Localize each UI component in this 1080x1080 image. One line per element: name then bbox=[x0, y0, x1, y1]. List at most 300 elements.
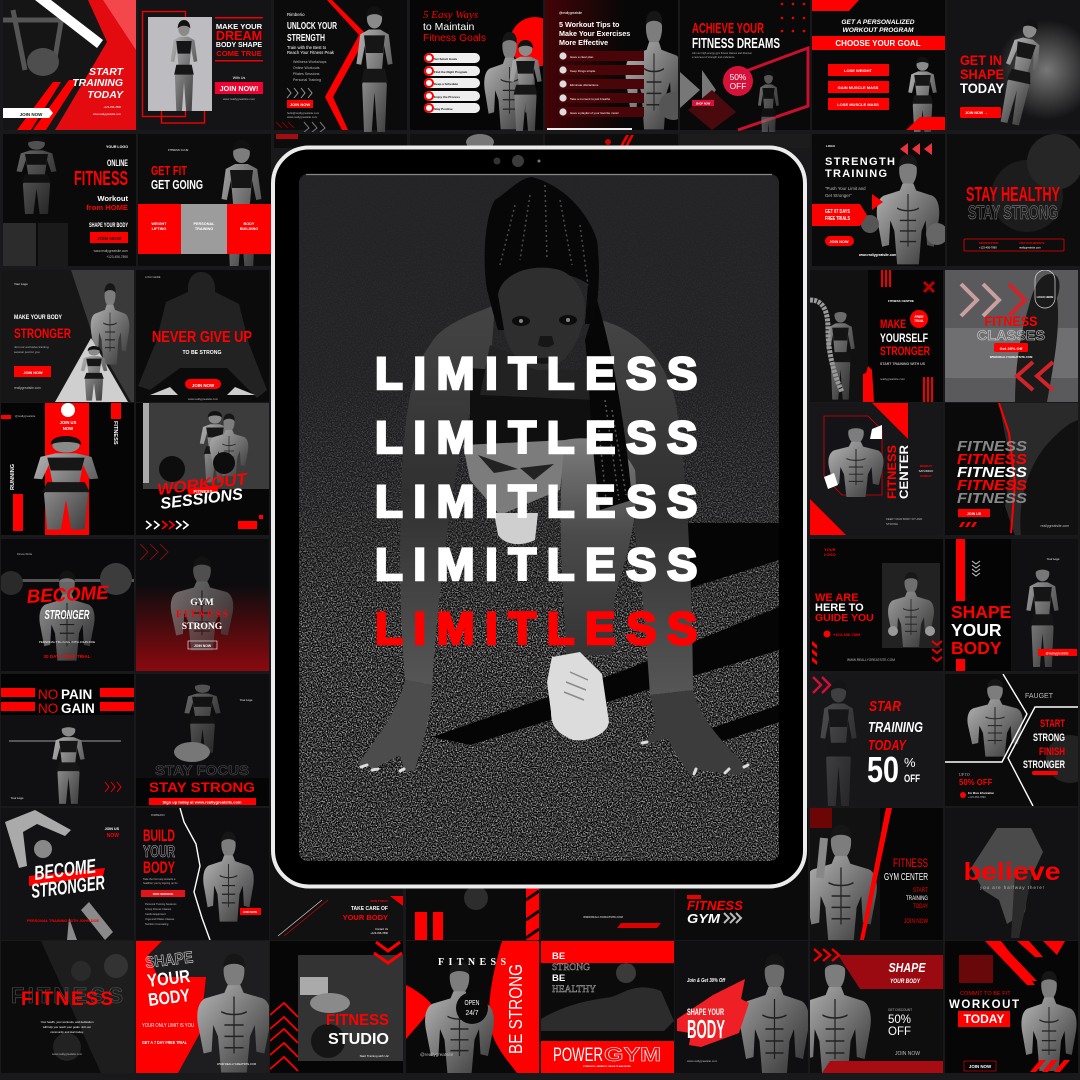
tile: strength training: LOGO bbox=[826, 144, 835, 148]
tile: become stronger: JOIN US bbox=[105, 827, 120, 831]
tile: workout today: JOIN NOW bbox=[969, 1064, 992, 1069]
tile: strength training: STRENGTH bbox=[825, 156, 895, 168]
tile: we are here to guide you: YOUR bbox=[824, 547, 836, 552]
tile: shape your body text: SHAPE bbox=[951, 602, 1011, 622]
tile: stay healthy stay strong bbox=[947, 134, 1080, 267]
tile: start strong finish stronger: FINISH bbox=[1039, 746, 1065, 758]
list of tips: Find the Right Program bbox=[434, 70, 468, 74]
tile: build your body: Nutrition Counseling bbox=[145, 922, 169, 926]
tile: fitness studio: STUDIO bbox=[328, 1031, 389, 1048]
tile: believe: you are halfway there! bbox=[980, 885, 1044, 890]
service panels bbox=[138, 204, 271, 254]
tile: unlock your strength: Pilates Sessions bbox=[293, 72, 320, 76]
headline: limitless repeated bbox=[375, 348, 708, 654]
tile: fitness gym partly hidden: GYM bbox=[687, 911, 721, 926]
tile: get fit get going: FITNESS CLUB bbox=[168, 148, 188, 152]
tile: shape your body 50 off: YOUR BODY bbox=[890, 978, 920, 985]
tile: fitness repeated bbox=[945, 403, 1078, 536]
tile: shape your body text: YOUR bbox=[951, 620, 1002, 640]
tile: fitness dumbbells bbox=[1, 941, 134, 1073]
tile: we are here to guide you: LOGO bbox=[824, 552, 836, 557]
tile: fitness center: KEEP YOUR BODY FIT AND bbox=[886, 517, 922, 521]
tile: power gym: BE bbox=[552, 973, 565, 984]
tile: build your body: Yoga and Pilates Classes bbox=[145, 917, 175, 921]
tile: running join us: FITNESS bbox=[112, 421, 118, 445]
tile: website partly hidden bbox=[541, 808, 674, 940]
tile: never give up: www.reallygreatsite.com bbox=[188, 397, 219, 401]
tile: get in shape today: SHAPE bbox=[960, 67, 1004, 82]
tile: build your body: OUR SERVICE bbox=[153, 892, 173, 896]
tile: strength training: FREE TRIALS bbox=[825, 216, 851, 222]
tile: shape your body bbox=[136, 941, 271, 1073]
tile: achieve your fitness dreams: SHOP NOW bbox=[696, 102, 711, 106]
tile: make yourself stronger bbox=[810, 270, 943, 402]
tile: make your dream body shape: COME TRUE bbox=[216, 49, 262, 58]
tile: strength training: JOIN NOW bbox=[829, 240, 849, 244]
tile: 5 workout tips bbox=[545, 0, 687, 130]
tile: never give up bbox=[136, 270, 269, 402]
tile: fitness studio bbox=[270, 941, 403, 1073]
tile: start training today: TODAY bbox=[87, 89, 124, 101]
tile: workout sessions: FITNESS bbox=[193, 489, 213, 494]
tile: make your dream body shape: DREAM bbox=[216, 29, 262, 43]
tile: 5 easy ways: Fitness Goals bbox=[423, 33, 486, 44]
tile: make yourself stronger: reallygreatsite.com bbox=[880, 377, 906, 381]
tile: fitness repeated: reallygreatsite.com bbox=[1041, 524, 1069, 528]
tile: workout today bbox=[945, 941, 1078, 1073]
tile: power gym: GYM bbox=[604, 1045, 661, 1066]
tile: unlock your strength: Online Workouts bbox=[293, 66, 320, 70]
tile: fitness be strong: OPEN bbox=[464, 998, 480, 1007]
tile: fitness gym center: FITNESS bbox=[893, 856, 928, 870]
tile: make your body stronger: Your Logo bbox=[14, 282, 28, 286]
tile: 5 workout tips: Take a moment to just breathe bbox=[570, 97, 611, 101]
tile: get fit get going: GET FIT bbox=[151, 163, 187, 178]
tile: unlock your strength: JOIN NOW bbox=[290, 102, 310, 107]
tile: no pain no gain: NO bbox=[38, 701, 58, 716]
tile: gym fitness strong: GYM bbox=[190, 597, 214, 608]
tile: star training 50% bbox=[812, 676, 923, 806]
tile: fitness repeated: FITNESS bbox=[957, 465, 1027, 481]
tile: shape your body brush: BODY bbox=[687, 1014, 725, 1044]
tile: build your body: Personal Training Sessions bbox=[145, 902, 177, 906]
service panels: PERSONAL bbox=[193, 222, 215, 226]
tile: online fitness: YOUR LOGO bbox=[106, 145, 128, 149]
tile: workout sessions: WORKOUT bbox=[156, 471, 249, 499]
tile: become stronger brush: PERSONAL TRAINING WITH JOHN DOE bbox=[39, 640, 95, 644]
tile: get in shape today: TODAY bbox=[960, 81, 1004, 96]
tile: get in shape today bbox=[960, 19, 1080, 126]
tile: fitness center bbox=[810, 403, 943, 536]
tile: online fitness: ONLINE bbox=[107, 158, 128, 168]
tile: start strong finish stronger: START bbox=[1040, 718, 1065, 730]
tile: fitness center: SUNDAY bbox=[920, 474, 932, 478]
tile: stay healthy stay strong: VISIT OUR WEBSITE bbox=[1019, 241, 1045, 245]
tile: fitness repeated: FITNESS bbox=[957, 452, 1027, 468]
tile: personalized workout program: GAIN MUSCLE MASS bbox=[838, 85, 879, 90]
tile: make yourself stronger: FREE bbox=[914, 315, 924, 319]
tile: fitness be strong: BE STRONG bbox=[506, 964, 526, 1054]
tile: become stronger: STRONGER bbox=[30, 872, 106, 903]
tile: achieve your fitness dreams: FITNESS DREAMS bbox=[692, 35, 780, 52]
tile: strength training: www.reallygreatsite.com bbox=[858, 253, 896, 257]
tile: running join us bbox=[1, 403, 134, 536]
tile: unlock your strength bbox=[274, 0, 407, 133]
tile: get fit get going bbox=[138, 134, 271, 270]
service panels: LIFTING bbox=[152, 227, 166, 231]
tile: fitness be strong: @reallygreatsite bbox=[420, 1052, 454, 1057]
tile: unlock your strength: STRENGTH bbox=[287, 33, 325, 44]
headline: limitless repeated: LIMITLESS bbox=[375, 412, 708, 463]
tile: star training 50%: TODAY bbox=[868, 737, 907, 754]
tile: fitness center: FITNESS bbox=[885, 445, 899, 499]
tile: shape your body 50 off bbox=[799, 941, 943, 1079]
tile: start training today: JOIN NOW bbox=[20, 112, 43, 117]
tile: become stronger: NOW bbox=[107, 833, 119, 839]
tile: never give up: LOGO HERE bbox=[145, 275, 161, 279]
tile: fitness center: SATURDAY bbox=[919, 469, 934, 473]
tile: make your dream body shape bbox=[142, 10, 263, 124]
tile: build your body bbox=[136, 808, 269, 940]
tile: personalized workout program: CHOOSE YOUR GOAL bbox=[835, 39, 921, 48]
tile: fitness dumbbells: FITNESS bbox=[21, 989, 113, 1010]
tile: get fit get going: GET GOING bbox=[151, 177, 203, 192]
track ground bbox=[299, 174, 779, 861]
tile: strength training: "Push Your Limit and bbox=[825, 186, 866, 191]
tile: make your dream body shape: BODY SHAPE bbox=[216, 42, 262, 49]
screen top edge bbox=[306, 174, 772, 176]
tile: personalized workout program: GET A PERSONALIZED bbox=[841, 19, 915, 26]
tile: shape your body 50 off: SHAPE bbox=[888, 961, 926, 975]
tile: start strong finish stronger: +123-456-7890 bbox=[968, 795, 986, 799]
tile: never give up: JOIN NOW bbox=[192, 383, 215, 388]
tile: stay focus stay strong: STAY STRONG bbox=[149, 780, 255, 795]
screen photo bbox=[299, 174, 779, 861]
tile: fitness gym center: GYM CENTER bbox=[884, 872, 928, 883]
tile: power gym: BE bbox=[552, 951, 565, 962]
tile: no pain no gain: GAIN bbox=[61, 701, 95, 716]
tile: build your body: YOUR bbox=[143, 843, 175, 861]
tile: fitness gym center: JOIN NOW bbox=[904, 918, 929, 925]
tile: fitness studio: Start Training with Us! bbox=[360, 1054, 389, 1058]
tile: stay healthy stay strong: REGISTRATION bbox=[979, 241, 999, 245]
tile: become stronger: BECOME bbox=[33, 856, 98, 885]
tile: shape your body text: Your Logo bbox=[1047, 557, 1060, 561]
tile: make your body stronger: session just for you bbox=[14, 350, 40, 354]
tile: we are here to guide you: WWW.REALLYGREATSITE.COM bbox=[847, 658, 895, 662]
tile: running join us: NOW bbox=[63, 426, 73, 431]
tile: take care of your body (partly hidden): +123-456-7890 bbox=[370, 931, 389, 935]
tile: shape your body brush: Join & Get 30% Off bbox=[687, 978, 726, 984]
tile: fitness be strong: FITNESS bbox=[438, 957, 506, 968]
tile: strength training: GET 07 DAYS bbox=[825, 209, 851, 215]
tile: online fitness: SHAPE YOUR BODY bbox=[89, 223, 128, 229]
tile: stay healthy stay strong: +123-456-7890 bbox=[979, 246, 997, 250]
tile: start strong finish stronger: For More Information bbox=[968, 791, 994, 795]
tile: become stronger brush: Fitness Works bbox=[17, 553, 33, 556]
tile: start strong finish stronger bbox=[945, 674, 1080, 806]
tile: make yourself stronger: YOURSELF bbox=[880, 331, 928, 345]
tile: power gym: HEALTHY bbox=[552, 985, 596, 995]
tile: 5 workout tips: 5 Workout Tips to bbox=[559, 20, 620, 29]
tile: shape your body: GET A 7 DAY FREE TRIAL bbox=[142, 1040, 187, 1046]
tile: fitness dumbbells: will help you reach your goals. Join our bbox=[43, 1025, 91, 1029]
tile: running join us: RUNNING bbox=[10, 464, 16, 490]
tile: personalized workout program: WORKOUT PROGRAM bbox=[842, 27, 914, 34]
tile: fitness center: STRONG bbox=[886, 522, 898, 526]
tile: take care of your body (partly hidden): Contact Us bbox=[375, 927, 389, 931]
tablet bbox=[273, 148, 805, 886]
tile: workout today: COMMIT TO BE FIT bbox=[960, 991, 1011, 997]
tile: shape your body 50 off: JOIN NOW bbox=[895, 1051, 920, 1057]
tile: stay focus stay strong: STAY FOCUS bbox=[155, 762, 249, 778]
tile: gym fitness strong: JOIN NOW bbox=[194, 644, 212, 648]
tile: achieve your fitness dreams: 50% bbox=[730, 72, 747, 82]
tile: fitness dumbbells: Your health, your workouts, and dedication bbox=[41, 1020, 94, 1024]
tile: power gym: STRONG bbox=[552, 963, 590, 973]
tile: stay healthy stay strong: reallygreatsite.com bbox=[1019, 246, 1041, 250]
tile: unlock your strength: Wellness Workshops bbox=[293, 60, 327, 64]
tile: unlock your strength: Train with the Best to bbox=[287, 45, 327, 50]
tile: shape your body 50 off: 50% bbox=[888, 1014, 911, 1026]
tile: 5 easy ways: 5 Easy Ways bbox=[423, 9, 478, 21]
tile: online fitness: from HOME bbox=[86, 203, 128, 212]
tile: 5 workout tips: Have a playlist of your favorite music bbox=[570, 111, 619, 115]
tile: build your body: Take the first step towards a bbox=[143, 877, 176, 881]
tile: fitness dumbbells: FITNESS bbox=[11, 983, 123, 1008]
tile: fitness classes: CLASSES bbox=[977, 327, 1045, 343]
tile: become stronger: PERSONAL TRAINING WITH JOHN DOE bbox=[27, 919, 100, 923]
tile: make yourself stronger: MAKE bbox=[880, 317, 906, 331]
tile: get in shape today: GET IN bbox=[960, 53, 1002, 68]
tile: fitness gym center bbox=[805, 808, 943, 944]
tile: no pain no gain: PAIN bbox=[61, 687, 92, 702]
tile: build your body: Group Fitness Classes bbox=[145, 907, 172, 911]
tile: start strong finish stronger: 50% OFF bbox=[959, 778, 993, 787]
list of tips: Set Smart Goals bbox=[434, 57, 458, 61]
tile: gym fitness strong bbox=[136, 539, 269, 671]
tile: stay focus stay strong bbox=[136, 674, 269, 806]
tile: online fitness: Workout bbox=[97, 194, 128, 203]
tile: make your body stronger: JOIN NOW bbox=[23, 371, 43, 375]
tile: become stronger brush: 30 DAYS FREE TRIAL bbox=[43, 654, 91, 659]
tile: shape your body text: BODY bbox=[951, 638, 1002, 658]
tile: believe: believe bbox=[964, 858, 1061, 886]
tile: shape your body 50 off: GET DISCOUNT bbox=[888, 1008, 912, 1012]
tile: 5 workout tips: Eliminate distractions bbox=[570, 83, 599, 87]
tile: unlock your strength: Rimberio bbox=[287, 12, 305, 17]
tile: start training today: TRAINING bbox=[72, 77, 123, 89]
tile: become stronger brush bbox=[0, 539, 134, 671]
headline: limitless repeated: LIMITLESS bbox=[375, 603, 708, 654]
tile: star training 50%: OFF bbox=[904, 773, 920, 785]
tile: online fitness: +123-456-7890 bbox=[106, 255, 128, 259]
tile: workout sessions bbox=[136, 403, 269, 536]
tile: power gym bbox=[541, 941, 674, 1073]
tile: fitness classes: LOGO HERE bbox=[1037, 295, 1054, 299]
tile: fitness center: CENTER bbox=[897, 445, 911, 499]
tile: workout sessions: SESSIONS bbox=[159, 486, 244, 513]
tile: fitness be strong: 24/7 bbox=[466, 1008, 478, 1017]
tile: power gym: POWER bbox=[553, 1045, 603, 1066]
tile: make your dream body shape: www.reallygreatsite.com bbox=[223, 97, 256, 101]
tile: build your body: BODY bbox=[143, 859, 175, 877]
tile: fitness center: MONDAY bbox=[920, 464, 932, 468]
tile: make your body stronger: reallygreatsite.com bbox=[14, 386, 41, 390]
tile: shape your body: SHAPE bbox=[144, 949, 194, 972]
athlete bbox=[358, 177, 750, 775]
tile: running join us: @reallygreatsite bbox=[15, 414, 36, 418]
list of tips: Keep a Schedule bbox=[434, 82, 458, 86]
tile: build your body: Cardio Equipment bbox=[145, 912, 166, 916]
tile: 5 workout tips: More Effective bbox=[559, 38, 608, 47]
tile: make yourself stronger: STRONGER bbox=[880, 344, 930, 358]
tile: become stronger brush: BECOME bbox=[26, 583, 110, 608]
tile: build your body: RIMBERIO bbox=[151, 813, 166, 817]
tile: never give up: NEVER GIVE UP bbox=[152, 329, 252, 346]
tile: website partly hidden: WWW.REALLYGREATSITE.COM bbox=[583, 915, 623, 919]
tile: star training 50%: % bbox=[904, 755, 916, 770]
tile: we are here to guide you bbox=[810, 539, 943, 671]
tile: personalized workout program: LOSE WEIGHT bbox=[844, 68, 873, 73]
tile: start strong finish stronger: FAUGET bbox=[1025, 693, 1054, 700]
tile: build your body: JOIN NOW bbox=[243, 910, 257, 914]
tablet frame bbox=[273, 148, 805, 886]
tile: achieve your fitness dreams: ACHIEVE YOUR bbox=[692, 20, 764, 37]
tile: fitness gym center: TODAY bbox=[913, 903, 928, 910]
tile: shape your body: BODY bbox=[147, 985, 191, 1010]
tile: make your body stronger: MAKE YOUR BODY bbox=[14, 314, 62, 321]
tile: take care of your body (partly hidden): TAKE CARE OF bbox=[351, 906, 388, 912]
camera dots bbox=[494, 155, 540, 167]
tile: unlock your strength: Personal Training bbox=[293, 78, 321, 82]
tile: gym fitness strong: FITNESS bbox=[176, 609, 228, 620]
tile: start strong finish stronger: STRONG bbox=[1033, 732, 1065, 744]
tile: shape your body brush bbox=[675, 941, 809, 1079]
tile: take care of your body (partly hidden) bbox=[270, 808, 403, 940]
tile: stay focus stay strong: Your Logo bbox=[240, 698, 253, 702]
tile: no pain no gain: Your Logo bbox=[11, 796, 24, 800]
tile: 5 workout tips: Keep things simple bbox=[570, 69, 596, 73]
tile: make your body stronger: Join our exclusive training bbox=[14, 345, 49, 349]
shadow bands bbox=[432, 523, 779, 745]
tile: star training 50%: STAR bbox=[869, 698, 901, 715]
tile: fitness classes: Get 25% Off bbox=[1000, 346, 1023, 351]
tile: never give up: TO BE STRONG bbox=[182, 350, 222, 356]
tile: fitness repeated: FITNESS bbox=[957, 491, 1027, 507]
tile: personalized workout program: LOSE MUSCLE MASS bbox=[837, 102, 879, 107]
tile: get in shape today: JOIN NOW → bbox=[965, 111, 988, 115]
tile: make your dream body shape: MAKE YOUR bbox=[216, 22, 263, 31]
headline: limitless repeated: LIMITLESS bbox=[375, 348, 708, 399]
tile: fitness repeated: FITNESS bbox=[957, 439, 1027, 455]
tile: fitness gym center: START bbox=[913, 887, 928, 894]
tile: shape your body text: @reallygreatsite bbox=[1045, 652, 1069, 656]
tile: power gym: STRENGTH, SERENITY, RESULTS AND MORE bbox=[583, 1065, 631, 1068]
tile: no pain no gain: NO bbox=[38, 687, 58, 702]
headline: limitless repeated: LIMITLESS bbox=[375, 476, 708, 527]
tile: online fitness bbox=[3, 134, 136, 267]
tile: we are here to guide you: +123-456-7890 bbox=[833, 632, 861, 637]
tile: build your body: BUILD bbox=[143, 827, 175, 845]
service panels: TRAINING bbox=[195, 227, 213, 231]
tile: fitness studio: FITNESS bbox=[326, 1012, 389, 1029]
tile: personalized workout program bbox=[812, 0, 945, 135]
tile: online fitness: JOIN NOW bbox=[97, 236, 122, 242]
tile: make your body stronger bbox=[1, 270, 134, 402]
tile: fitness repeated: JOIN US bbox=[967, 512, 982, 516]
service panels: WEIGHT bbox=[151, 222, 167, 226]
list of tips bbox=[424, 53, 480, 113]
tile: shape your body: WWW.REALLYGREATSITE.COM bbox=[217, 1062, 256, 1066]
tile: start strong finish stronger: UP TO bbox=[959, 773, 970, 777]
tile: fitness dumbbells: www.reallygreatsite.com bbox=[52, 1052, 83, 1056]
tile: start training today bbox=[3, 0, 136, 130]
tile: 5 workout tips: @reallygreatsite bbox=[559, 11, 582, 15]
tile: workout today: TODAY bbox=[964, 1012, 1004, 1026]
tile: unlock your strength: Reach Your Fitness Peak bbox=[287, 50, 335, 55]
tile: fitness classes bbox=[945, 270, 1078, 402]
tile: fitness dumbbells: community and start today. bbox=[50, 1030, 84, 1034]
tile: running join us: JOIN US bbox=[60, 420, 77, 425]
list of tips: Enjoy the Process bbox=[434, 95, 460, 99]
tile: we are here to guide you: GUIDE YOU bbox=[815, 612, 874, 624]
tile: achieve your fitness dreams: OFF bbox=[730, 81, 746, 91]
tile: achieve your fitness dreams: Join our high-energy gym fitness classes and discover bbox=[692, 52, 752, 55]
tile: star training 50%: 50 bbox=[867, 749, 899, 790]
tile: online fitness: FITNESS bbox=[74, 168, 128, 190]
tile: fitness partly hidden red bars bbox=[406, 808, 539, 940]
tile: fitness gym partly hidden bbox=[675, 808, 808, 940]
headline: limitless repeated: LIMITLESS bbox=[375, 539, 708, 590]
tile: 5 workout tips: Make Your Exercises bbox=[559, 29, 630, 38]
tile: shape your body text bbox=[945, 539, 1078, 671]
tile: make yourself stronger: TRIAL bbox=[914, 319, 924, 323]
tile: star training 50%: TRAINING bbox=[868, 719, 923, 736]
tile slivers behind tablet top bbox=[274, 134, 810, 150]
tile: start training today: www.reallygreatsite.com bbox=[93, 112, 121, 116]
tile: make your dream body shape: JOIN NOW! bbox=[220, 84, 258, 93]
tile: build your body: healthier you by signing up for bbox=[143, 881, 178, 885]
tile: start training today: +123-456-7890 bbox=[103, 105, 122, 109]
tile: shape your body 50 off: OFF bbox=[888, 1026, 911, 1038]
tile: strength training: TRAINING bbox=[825, 168, 887, 180]
tile: achieve your fitness dreams: a new level of strength and endurance. bbox=[692, 56, 735, 59]
tile: fitness gym partly hidden: FITNESS bbox=[687, 898, 743, 913]
tile: make yourself stronger: START TRAINING WITH US bbox=[880, 361, 925, 366]
tile: fitness be strong bbox=[406, 941, 539, 1074]
tile: make your dream body shape: With Us bbox=[233, 76, 245, 80]
tile: unlock your strength: www.reallygreatsite.com bbox=[287, 115, 318, 119]
tile: unlock your strength: UNLOCK YOUR bbox=[287, 21, 338, 32]
tile: fitness repeated: FITNESS bbox=[957, 478, 1027, 494]
tile: shape your body: YOUR bbox=[146, 966, 191, 991]
tile: fitness classes: WWW.REALLYGREATSITE.COM bbox=[990, 355, 1033, 359]
tile: fitness gym center: TRAINING bbox=[906, 895, 928, 902]
tile: gym fitness strong: STRONG bbox=[182, 621, 223, 632]
tile: unlock your strength: hello@reallygreatsite.com bbox=[287, 111, 320, 115]
tile: 5 workout tips: Have a clear plan bbox=[570, 55, 594, 59]
tile: shape your body brush: www.reallygreatsite.com bbox=[687, 1059, 718, 1063]
tile: become stronger bbox=[5, 810, 119, 940]
tile: achieve your fitness dreams bbox=[680, 0, 810, 132]
tile: we are here to guide you: HERE TO bbox=[815, 602, 864, 614]
service panels: BUILDING bbox=[240, 227, 258, 231]
service panels: BODY bbox=[244, 222, 255, 226]
tile: make yourself stronger: FITNESS CENTRE bbox=[888, 299, 914, 303]
tile: shape your body brush: SHAPE YOUR bbox=[687, 1007, 724, 1017]
tile: take care of your body (partly hidden): YOUR BODY bbox=[343, 913, 388, 922]
